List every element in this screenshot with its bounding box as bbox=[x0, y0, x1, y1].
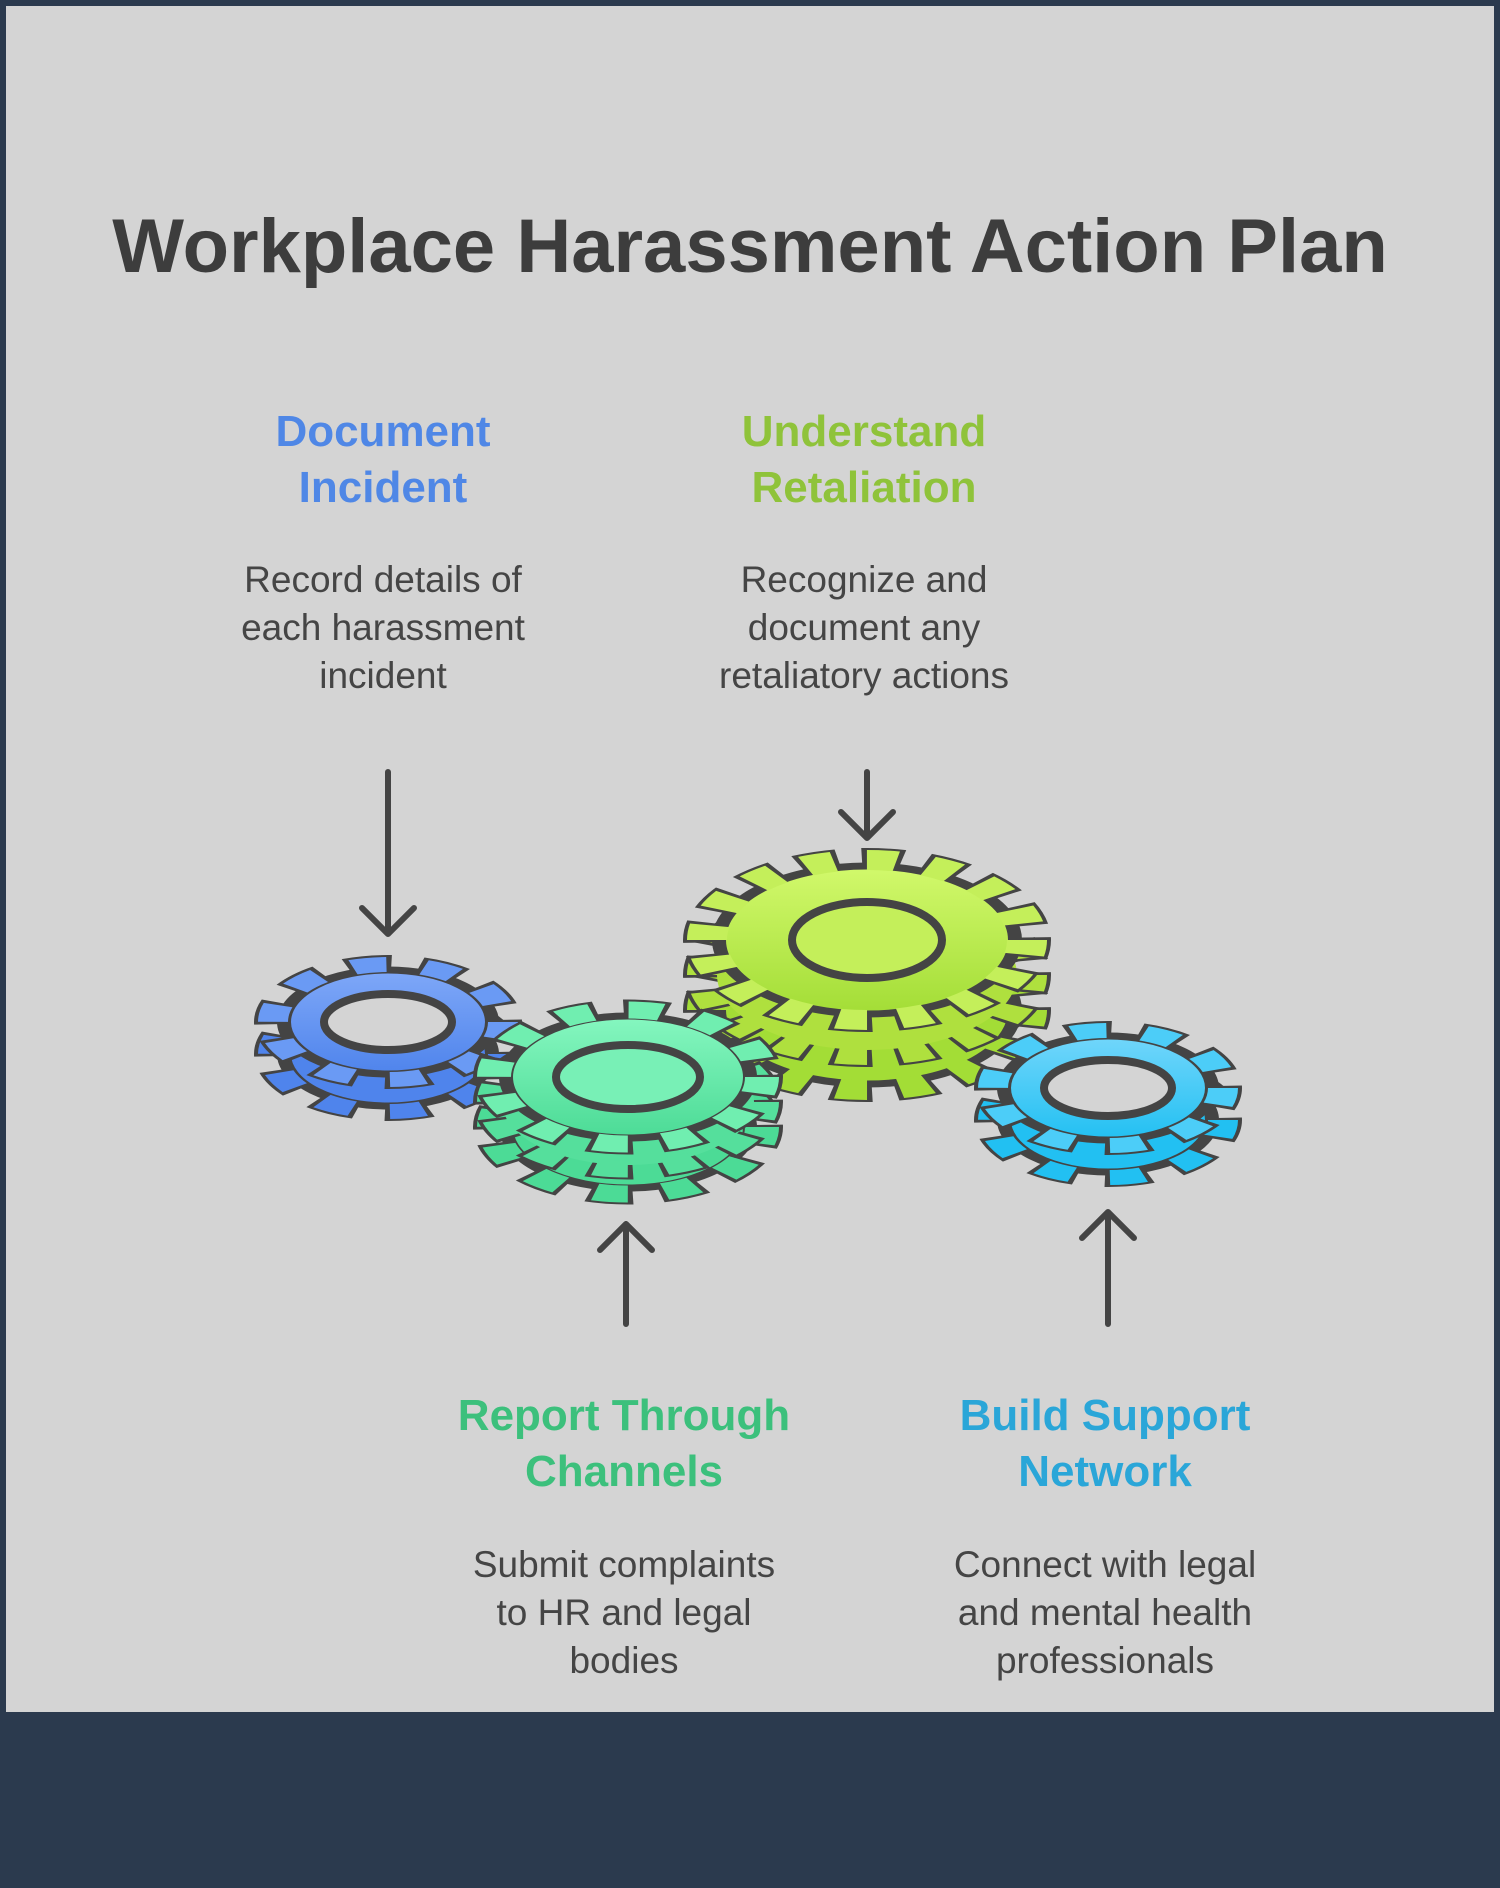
heading: Report Through Channels bbox=[458, 1391, 790, 1496]
text: retaliation bbox=[719, 559, 1009, 696]
text: report: bodies bbox=[569, 1640, 679, 1681]
text: retaliation: retaliatory actions bbox=[719, 655, 1009, 696]
title: Workplace Harassment Action Plan bbox=[112, 204, 1388, 289]
arrow: report bbox=[600, 1224, 652, 1324]
arrow: document bbox=[362, 772, 414, 934]
heading: Understand Retaliation: Retaliation bbox=[752, 463, 976, 512]
text: report: to HR and legal bbox=[496, 1592, 752, 1633]
gear: blue bbox=[273, 964, 503, 1112]
arrow: retaliation bbox=[841, 772, 893, 838]
text: retaliation: document any bbox=[748, 607, 980, 648]
heading: Report Through Channels: Channels bbox=[525, 1447, 723, 1496]
text: document: incident bbox=[319, 655, 447, 696]
text: support: professionals bbox=[996, 1640, 1214, 1681]
text: report bbox=[473, 1544, 775, 1681]
heading: Understand Retaliation: Understand bbox=[742, 407, 986, 456]
text: support: and mental health bbox=[958, 1592, 1252, 1633]
text: document: Record details of bbox=[244, 559, 522, 600]
heading: Understand Retaliation bbox=[742, 407, 986, 512]
heading: Document Incident: Incident bbox=[299, 463, 467, 512]
arrow: support bbox=[1082, 1212, 1134, 1324]
text: support: Connect with legal bbox=[954, 1544, 1256, 1585]
heading: Build Support Network: Network bbox=[1018, 1447, 1192, 1496]
heading: Report Through Channels: Report Through bbox=[458, 1391, 790, 1440]
text: retaliation: Recognize and bbox=[741, 559, 987, 600]
heading: Build Support Network: Build Support bbox=[960, 1391, 1250, 1440]
heading: Build Support Network bbox=[960, 1391, 1250, 1496]
text: support bbox=[954, 1544, 1256, 1681]
gear: lime bbox=[707, 860, 1027, 1090]
text: document: each harassment bbox=[241, 607, 525, 648]
gear: green bbox=[494, 1010, 762, 1194]
heading: Document Incident bbox=[275, 407, 491, 512]
gear: cyan bbox=[993, 1030, 1223, 1178]
text: document bbox=[241, 559, 525, 696]
text: report: Submit complaints bbox=[473, 1544, 775, 1585]
heading: Document Incident: Document bbox=[275, 407, 491, 456]
